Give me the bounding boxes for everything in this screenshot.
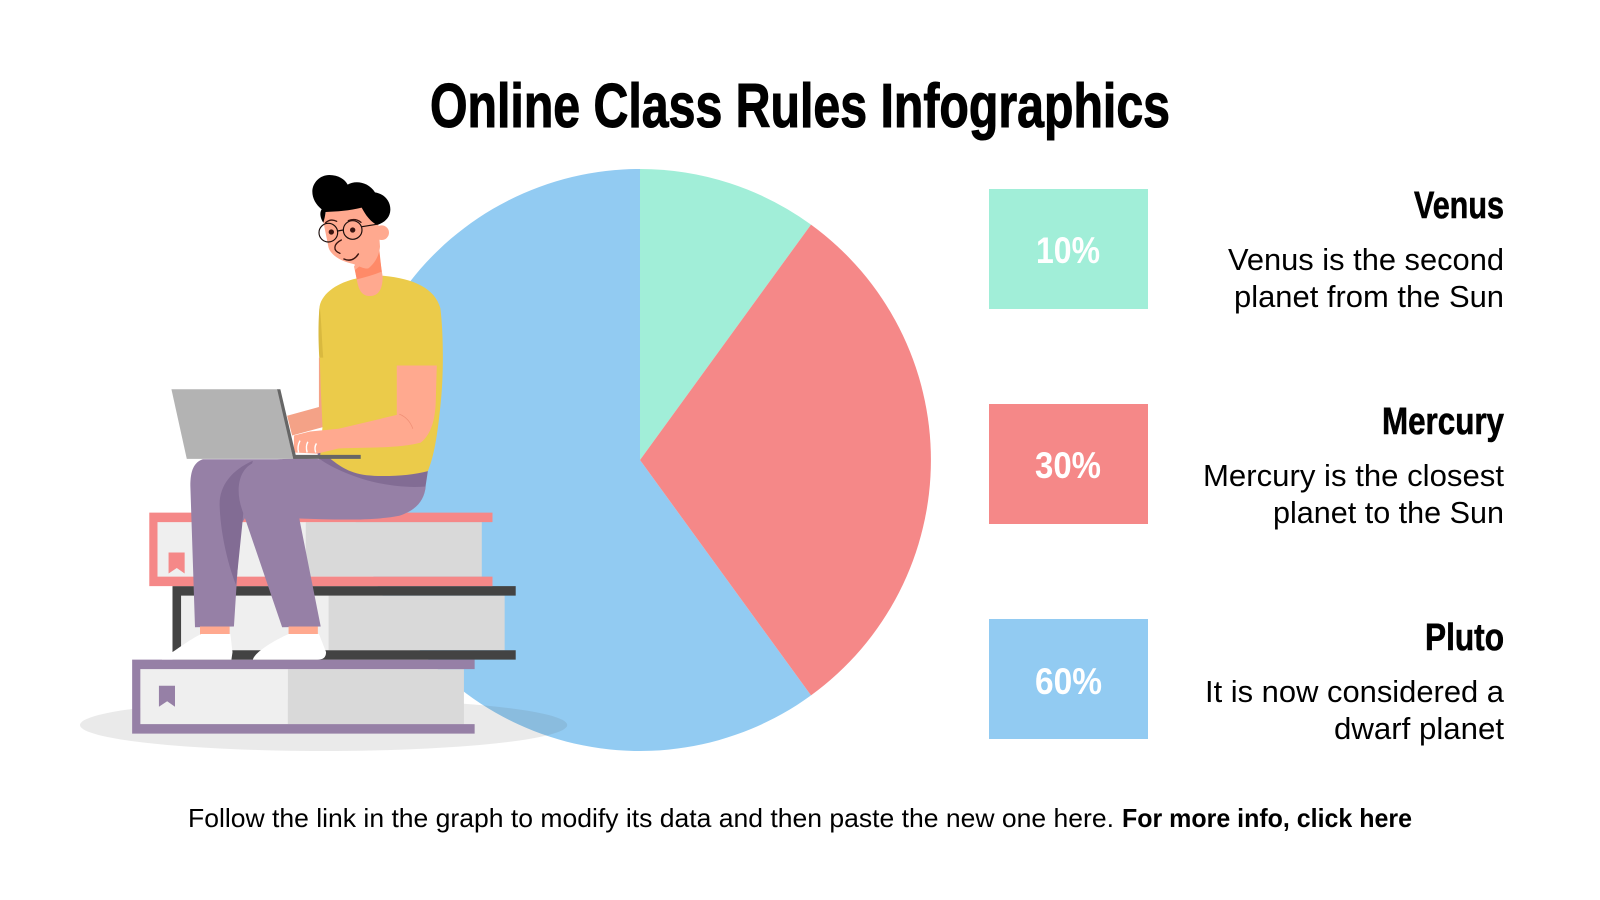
ankles xyxy=(200,626,318,635)
description: Mercury xyxy=(1203,458,1504,530)
percent box: 60% xyxy=(989,619,1148,739)
pie slice: Mercury 30% xyxy=(640,225,931,695)
hair xyxy=(312,175,390,225)
far arm xyxy=(287,358,324,435)
waist shadow xyxy=(317,452,428,494)
leg shading xyxy=(220,461,253,585)
description: Pluto: dwarf planet xyxy=(1334,711,1504,746)
pie chart xyxy=(349,169,931,751)
top book xyxy=(149,513,492,586)
near leg xyxy=(239,458,426,627)
person head xyxy=(312,175,390,296)
legend row: Mercury xyxy=(989,401,1504,530)
book stack xyxy=(132,513,516,734)
shoes xyxy=(162,634,326,660)
footer note: For more info, click here xyxy=(1122,803,1412,833)
percent label: 10% xyxy=(1036,230,1100,271)
percent label: 30% xyxy=(1035,445,1101,486)
neck xyxy=(354,237,383,296)
illustration: student with laptop on books xyxy=(80,175,567,751)
description: Pluto: It is now considered a xyxy=(1205,674,1505,709)
ground shadow xyxy=(80,699,567,751)
pie slice: Pluto 60% xyxy=(349,169,811,751)
person body xyxy=(162,276,443,660)
description: Pluto xyxy=(1205,674,1505,746)
description: Venus: Venus is the second xyxy=(1228,242,1504,277)
bottom book xyxy=(132,660,475,734)
glasses and features xyxy=(319,220,377,260)
heading: Pluto: Pluto xyxy=(1425,617,1504,659)
legend row: Venus xyxy=(989,185,1504,314)
heading: Venus: Venus xyxy=(1414,185,1504,227)
face xyxy=(323,203,380,269)
heading: Mercury: Mercury xyxy=(1382,401,1504,443)
description: Mercury: Mercury is the closest xyxy=(1203,458,1504,493)
description: Venus: planet from the Sun xyxy=(1234,279,1504,314)
legend row: Pluto xyxy=(989,617,1505,746)
pie slice: Venus 10% xyxy=(640,169,811,460)
description: Mercury: planet to the Sun xyxy=(1273,495,1504,530)
fingers xyxy=(298,441,316,452)
percent box: 10% xyxy=(989,189,1148,309)
footer note: Follow the link in the graph to modify its data and then paste the new one here. xyxy=(188,803,1114,833)
title: Online Class Rules Infographics xyxy=(430,72,1170,141)
ear xyxy=(374,225,389,240)
laptop xyxy=(171,389,361,459)
percent label: 60% xyxy=(1035,661,1102,702)
percent box: 30% xyxy=(989,404,1148,524)
shirt xyxy=(319,276,443,476)
far leg xyxy=(190,459,281,627)
middle book xyxy=(172,586,516,660)
near arm xyxy=(294,365,437,454)
description: Venus xyxy=(1228,242,1504,314)
